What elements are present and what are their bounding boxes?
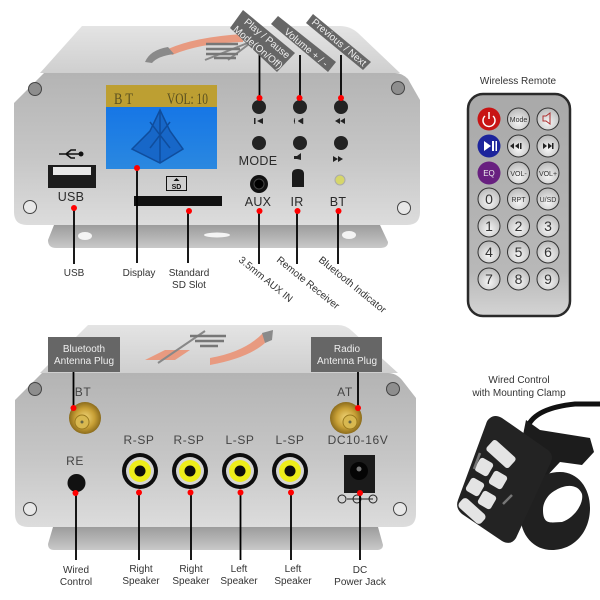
coloured keys [478,108,500,184]
callout: Left Speaker 2 [274,490,312,587]
callout: USB [64,205,85,279]
callout: Wired Control: Control [60,577,92,588]
key legends: 1 [485,218,493,234]
buttons column 2 [290,100,307,209]
callout: Play / Pause [230,10,295,101]
buttons column 1 [239,100,277,209]
callout: Remote Receiver [274,208,342,312]
key legends: 6 [544,244,552,260]
callout: SD slot: Standard [169,268,209,279]
RE jack [66,454,86,492]
key legends: U/SD [540,197,556,204]
callout: Bluetooth Antenna Plug: Bluetooth [63,344,105,355]
buttons column 1: MODE [239,154,277,168]
mounting bracket [48,225,388,248]
buttons column 3: BT [330,195,346,209]
callout: Display: Display [123,268,155,279]
callout: Bluetooth Antenna Plug: Antenna Plug [54,356,114,367]
callout: Volume [271,16,336,101]
front face [14,73,420,225]
key legends: 5 [515,244,523,260]
callout: Previous / Next [306,14,371,101]
LCD display [106,85,217,169]
callout: Left Speaker 2: Speaker [274,576,312,587]
wired control with clamp [457,404,600,550]
clamp connector [520,420,594,478]
callout: SD slot: SD Slot [172,280,206,291]
wireless remote [468,94,570,316]
key legends: Mode [510,117,527,124]
RCA jacks: L-SP [275,433,305,447]
rear face [15,373,416,527]
callout: Bluetooth Indicator [316,208,388,316]
RE jack: RE [66,454,84,468]
RCA jacks: L-SP [225,433,255,447]
subheading: mounting clamp: with Mounting Clamp [471,388,566,399]
key legends: 8 [515,271,523,287]
callout: Display [123,165,155,279]
callout: Right Speaker 2: Speaker [172,576,210,587]
clamp ring [520,472,590,550]
heading: wired control: Wired Control [488,375,550,386]
callout: Radio Antenna Plug [311,337,382,411]
callout: Play / Pause: Mode(On/Off) [231,24,284,72]
heading: wireless remote: Wireless Remote [480,76,556,87]
buttons column 1: AUX [245,195,272,209]
DC jack [328,433,388,503]
callout: Bluetooth Indicator: Bluetooth Indicator [316,255,388,316]
side indicator strips [474,453,512,504]
grey keys [478,108,559,290]
USB symbol and port: USB [58,190,84,204]
rear panel device [15,325,416,550]
callout: DC Power Jack: Power Jack [334,577,387,588]
DC jack: DC10-16V [328,433,388,447]
callout: Wired Control: Wired [63,565,89,576]
callout: Left Speaker 1: Speaker [220,576,258,587]
key legends: 4 [485,244,493,260]
callout: SD slot [169,208,209,291]
control buttons [457,439,517,525]
rear lid logo [145,330,273,365]
buttons column 2: IR [290,195,304,209]
LCD display: VOL: 10 [167,91,208,108]
BT antenna connector [69,385,101,434]
radio antenna connector [330,385,362,434]
callout: Wired Control [60,490,92,588]
front panel device [14,26,420,248]
callout: Right Speaker 1: Right [129,564,153,575]
callout: USB: USB [64,268,85,279]
key legends: VOL+ [539,171,557,178]
callout: DC Power Jack: DC [353,565,367,576]
callout: Right Speaker 2: Right [179,564,203,575]
RCA jacks: R-SP [123,433,155,447]
rear bracket [48,527,383,550]
callout: AUX [236,208,294,305]
callout: Remote Receiver: Remote Receiver [274,255,342,312]
key legends: 9 [544,271,552,287]
control body [457,416,552,543]
key legends [485,113,557,287]
callout: DC Power Jack [334,490,387,588]
key legends: 3 [544,218,552,234]
callout: Radio Antenna Plug: Radio [334,344,360,355]
SD slot: SD [172,184,181,191]
device lid [40,26,400,73]
LCD display: B T [114,91,133,108]
bluetooth logo [132,110,183,163]
callout: Previous / Next: Previous / Next [309,17,368,69]
key legends: 0 [485,191,493,207]
callout: Bluetooth Antenna Plug [48,337,120,411]
callout: Right Speaker 2 [172,490,210,587]
RCA jacks [122,433,308,489]
rear screws [24,382,406,516]
callout: Left Speaker 1: Left [231,564,248,575]
RCA jacks: R-SP [173,433,205,447]
cable [528,404,600,426]
USB symbol and port [48,150,96,204]
callout: Volume: Volume + / - [282,27,330,70]
callout: Play / Pause: Play / Pause [242,17,292,62]
key legends: RPT [512,197,526,204]
BT antenna connector: BT [75,385,91,399]
callout: AUX: 3.5mm AUX IN [236,255,294,305]
callout: Right Speaker 1: Speaker [122,576,160,587]
lid logo [145,34,255,63]
rear lid [40,325,398,373]
coloured keys: EQ [483,169,495,178]
radio antenna connector: AT [337,385,353,399]
bracket slots [78,231,356,240]
key legends: VOL- [510,171,527,178]
callout: Left Speaker 2: Left [285,564,302,575]
callout: Right Speaker 1 [122,490,160,587]
SD slot [134,176,222,206]
screws [24,82,410,214]
callout: Radio Antenna Plug: Antenna Plug [317,356,377,367]
key legends: 7 [485,271,493,287]
callout: Left Speaker 1 [220,490,258,587]
key legends: 2 [515,218,523,234]
buttons column 3 [330,100,348,209]
